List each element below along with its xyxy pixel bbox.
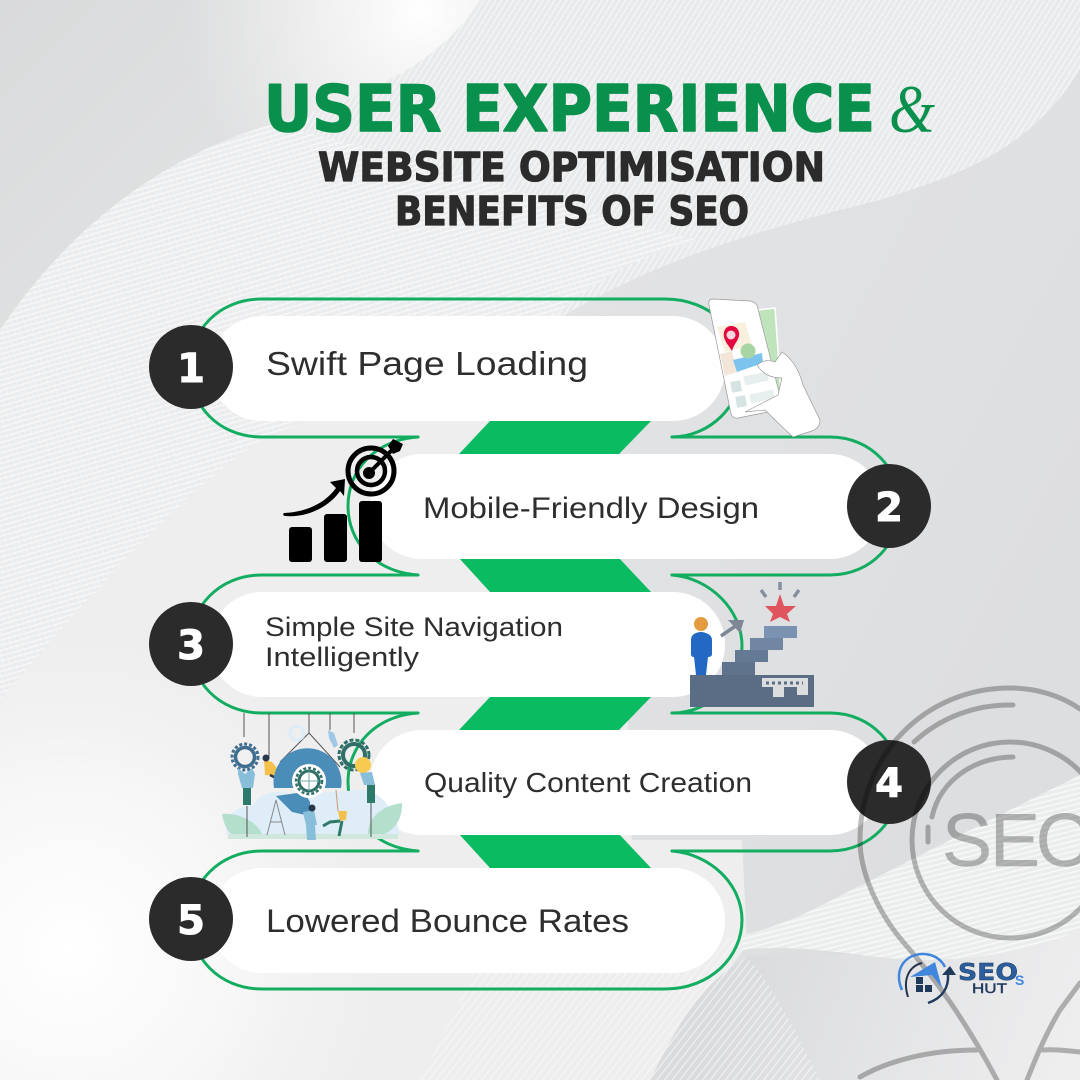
label (265, 612, 563, 672)
number badge 1 (149, 325, 233, 409)
label: Swift Page Loading (266, 345, 588, 382)
panel: quality content creation (370, 730, 931, 835)
green connector parallelograms (459, 421, 651, 868)
label: Intelligently (265, 642, 420, 672)
heading: benefits of seo: BENEFITS OF SEO (395, 189, 749, 235)
label: Mobile-Friendly Design (423, 492, 759, 525)
number badge 2 (847, 464, 931, 548)
number badge 1: 1 (177, 346, 205, 392)
number badge 3: 3 (177, 623, 205, 669)
icon: team building gears (222, 713, 402, 840)
label: Simple Site Navigation (265, 612, 563, 642)
number badge 4 (847, 740, 931, 824)
panel: mobile-friendly design (370, 454, 931, 559)
panel: swift page loading (149, 316, 725, 421)
logo: SEOs Hut: S (1015, 972, 1024, 988)
label: Lowered Bounce Rates (266, 903, 629, 939)
number badge 5: 5 (177, 898, 205, 944)
heading: user experience: USER EXPERIENCE (264, 73, 875, 147)
label: Quality Content Creation (424, 767, 752, 798)
ampersand: & (889, 71, 935, 147)
panel: lowered bounce rates (149, 868, 725, 973)
logo: SEOs Hut (899, 954, 1024, 1003)
icon: person and stairs to star (690, 582, 814, 707)
icon: growth chart with target (283, 439, 403, 562)
icon: SEO location pin watermark (860, 688, 1080, 1080)
logo: SEOs Hut: SEO (958, 960, 1018, 986)
title (264, 71, 935, 235)
number badge 2: 2 (875, 485, 903, 531)
icon: phone with map in hand (709, 299, 820, 437)
green outlines (190, 299, 900, 989)
number badge 3 (149, 602, 233, 686)
logo: SEOs Hut: HUT (972, 980, 1008, 996)
number badge 4: 4 (875, 761, 903, 807)
panel: simple site navigation (149, 592, 725, 697)
heading: website optimisation: WEBSITE OPTIMISATION (318, 145, 825, 191)
number badge 5 (149, 877, 233, 961)
